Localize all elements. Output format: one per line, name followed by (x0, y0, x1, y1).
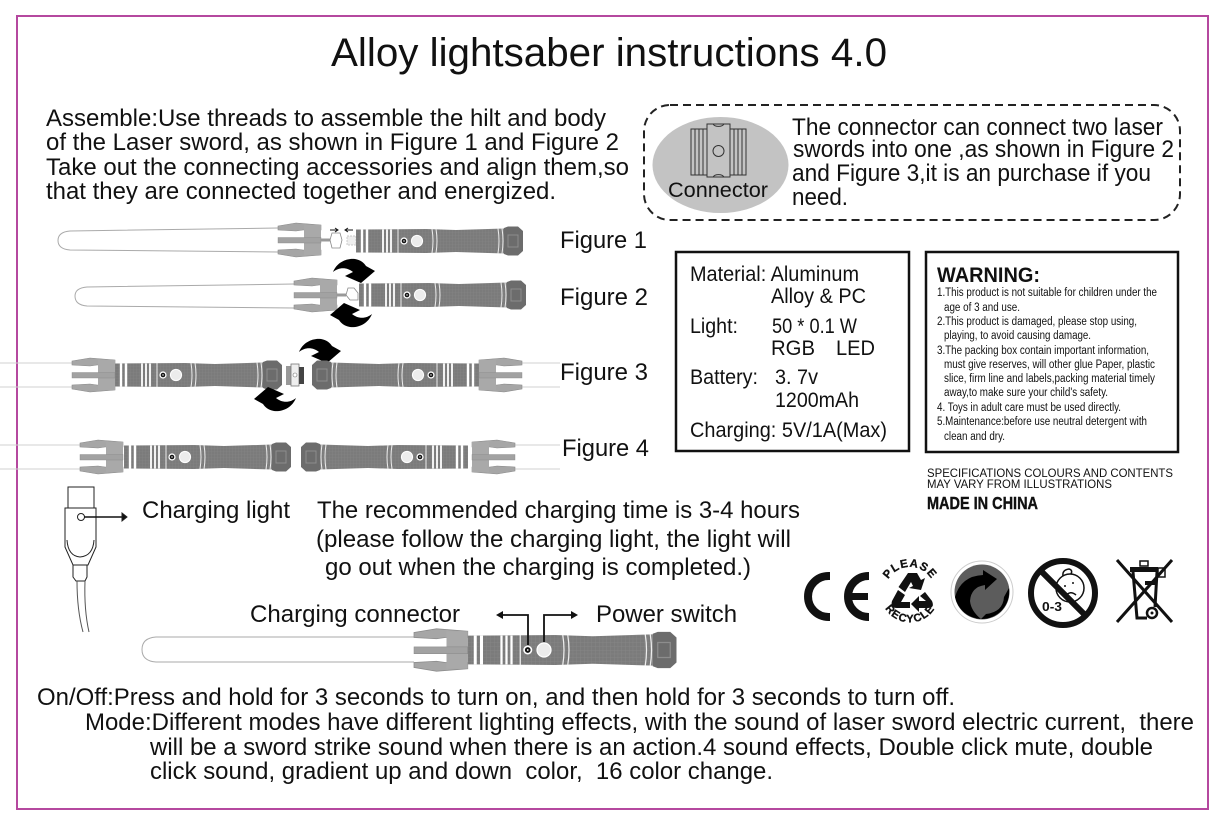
connector description text: The connector can connect two laser (792, 114, 1163, 141)
assembly instructions text block: of the Laser sword, as shown in Figure 1 and Figure 2 (46, 129, 619, 156)
on/off and mode instructions (37, 684, 1194, 785)
charging time text: go out when the charging is completed.) (325, 554, 751, 581)
figure 2 label: Figure 2 (560, 284, 648, 311)
figure 2 lightsaber (75, 278, 526, 312)
panel: warning: away,to make sure your child's safety. (944, 387, 1108, 399)
panel: specifications (676, 252, 909, 451)
assembly instructions text block: Assemble:Use threads to assemble the hilt and body (46, 105, 606, 132)
specifications disclaimer: MAY VARY FROM ILLUSTRATIONS (927, 479, 1112, 491)
icon: please recycle: RECYCLE (885, 604, 934, 623)
icon: not for ages 0-3 (1031, 561, 1095, 625)
panel: specifications: Battery: (690, 366, 758, 389)
panel: specifications: Material: Aluminum (690, 263, 859, 286)
rotate arrow below figure 3 (254, 387, 296, 411)
icon: not for ages 0-3: 0-3 (1042, 599, 1062, 614)
figure 4 joined lightsaber (0, 440, 560, 474)
charging time text: The recommended charging time is 3-4 hours (317, 497, 800, 524)
panel: warning: slice, firm line and labels,packing material timely (944, 373, 1155, 385)
charging connector label: Charging connector (250, 601, 460, 628)
on/off and mode instructions: On/Off:Press and hold for 3 seconds to turn on, and then hold for 3 seconds to turn off. (37, 684, 955, 711)
panel: warning (926, 252, 1178, 452)
rotate arrow below figure 2 (330, 303, 372, 327)
panel: specifications: 3. 7v (775, 366, 818, 389)
panel: specifications: Alloy & PC (771, 285, 866, 308)
icon: connector part: Connector (668, 178, 768, 202)
on/off and mode instructions: will be a sword strike sound when there is an action.4 sound effects, Double click mute, double (149, 734, 1153, 761)
assembly instructions text block: that they are connected together and energized. (46, 178, 556, 205)
on/off and mode instructions: Mode:Different modes have different lighting effects, with the sound of laser sword electric current, there (85, 709, 1194, 736)
connector description text: and Figure 3,it is an purchase if you (792, 160, 1151, 187)
panel: warning: age of 3 and use. (944, 302, 1020, 314)
figure 1 lightsaber (58, 223, 523, 257)
panel: warning: WARNING: (937, 264, 1040, 287)
panel: warning: 5.Maintenance:before use neutral detergent with (937, 416, 1147, 428)
panel: warning: 1.This product is not suitable for children under the (937, 287, 1157, 299)
icon: green dot (951, 561, 1013, 623)
on/off and mode instructions: click sound, gradient up and down color, 16 color change. (150, 758, 773, 785)
charging light label: Charging light (142, 497, 290, 524)
charging time text (316, 497, 800, 581)
panel: specifications: Light: (690, 315, 738, 338)
panel: warning: 4. Toys in adult care must be used directly. (937, 402, 1121, 414)
panel: specifications: Charging: 5V/1A(Max) (690, 419, 887, 442)
icon: WEEE crossed-out bin (1117, 560, 1172, 622)
lightsaber with connector and switch callouts (142, 611, 676, 671)
charging time text: (please follow the charging light, the light will (316, 526, 791, 553)
rotate arrow between figure 1 and 2 (333, 259, 375, 283)
panel: warning: 3.The packing box contain important information, (937, 345, 1149, 357)
panel: specifications: 50 * 0.1 W (772, 315, 857, 338)
power switch label: Power switch (596, 601, 737, 628)
specifications disclaimer: SPECIFICATIONS COLOURS AND CONTENTS (927, 468, 1173, 480)
panel: connector callout (644, 105, 1180, 220)
panel: specifications: 1200mAh (775, 389, 859, 412)
panel: specifications: RGB (771, 337, 815, 360)
figure 3 label: Figure 3 (560, 359, 648, 386)
title: Alloy lightsaber instructions 4.0 (331, 31, 887, 75)
panel: warning: must give reserves, will other glue Paper, plastic (944, 359, 1155, 371)
panel: warning: clean and dry. (944, 431, 1005, 443)
icon: please recycle (882, 559, 938, 623)
figure 4 label: Figure 4 (562, 435, 649, 462)
assembly instructions text block: Take out the connecting accessories and align them,so (46, 154, 629, 181)
specifications disclaimer (927, 468, 1173, 491)
icon: CE mark (808, 576, 869, 617)
connector description text: need. (792, 184, 848, 211)
icon: please recycle: PLEASE (882, 559, 938, 579)
panel: specifications: LED (836, 337, 875, 360)
panel: warning: playing, to avoid causing damage. (944, 330, 1091, 342)
icon: connector part (652, 117, 788, 213)
connector description text: swords into one ,as shown in Figure 2 (793, 136, 1174, 163)
made in china: MADE IN CHINA (927, 493, 1038, 513)
rotate arrow above figure 3 (299, 339, 341, 363)
connector description text (792, 114, 1174, 211)
icon: USB charging cable (65, 487, 127, 632)
figure 1 label: Figure 1 (560, 227, 647, 254)
assembly instructions text block (46, 105, 629, 205)
panel: warning: 2.This product is damaged, please stop using, (937, 316, 1137, 328)
figure 3 double lightsaber with connector (0, 358, 560, 392)
